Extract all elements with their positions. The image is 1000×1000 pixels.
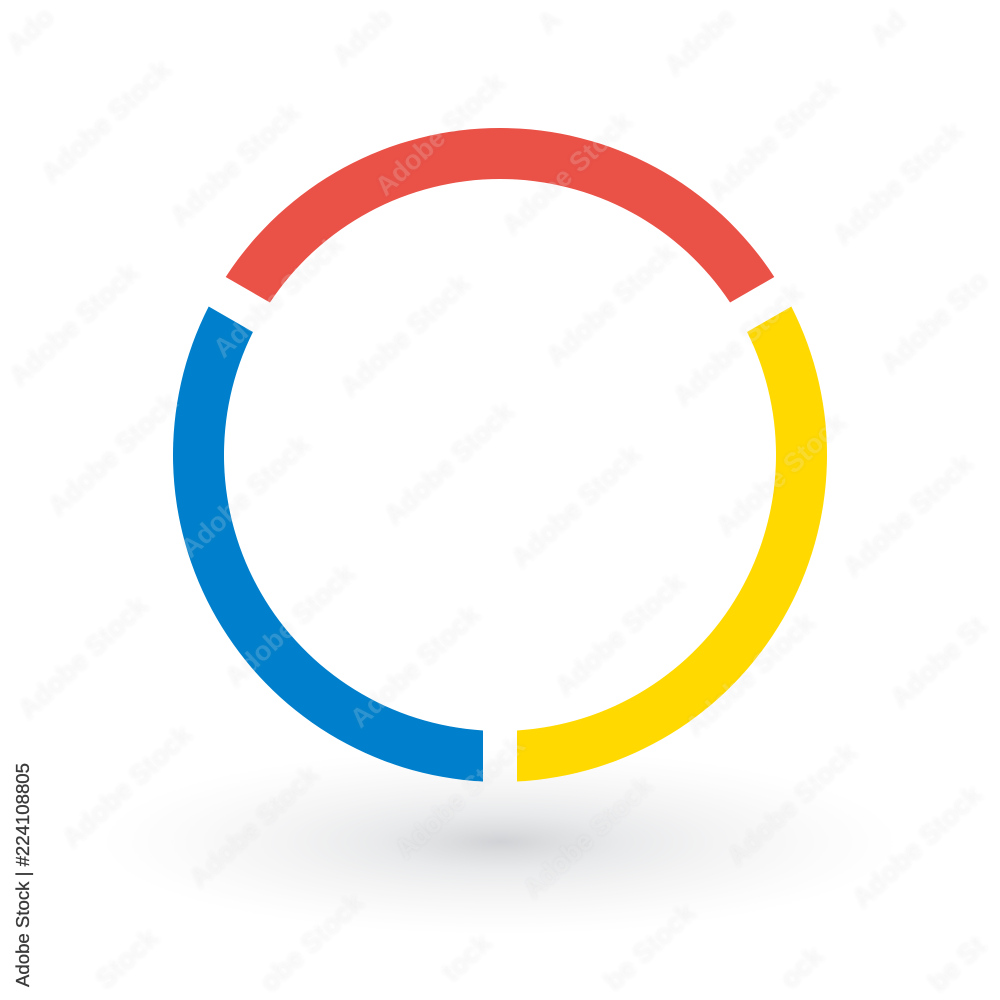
stock watermark pattern: Ado bbox=[1, 2, 59, 59]
stock watermark pattern: Adobe Stock bbox=[827, 116, 969, 251]
stock watermark pattern: Stock bbox=[90, 922, 165, 995]
stock watermark pattern: Adobe Stock bbox=[496, 106, 638, 241]
stock watermark pattern: be St bbox=[923, 930, 991, 997]
stock watermark pattern: Adobe Stock bbox=[174, 429, 316, 564]
stock watermark pattern: A bbox=[532, 4, 566, 39]
stock watermark pattern: Adobe Stock bbox=[12, 590, 154, 725]
stock watermark pattern: Adobe Stock bbox=[219, 558, 361, 693]
vertical stock image id text: Adobe Stock | #224108805 bbox=[12, 763, 33, 987]
stock watermark pattern: Adobe Stock bbox=[378, 396, 520, 531]
segment: red top arc bbox=[226, 128, 774, 303]
stock watermark pattern: Adobe Stock bbox=[710, 407, 852, 542]
stock watermark pattern: Adobe Stock bbox=[183, 759, 325, 894]
stock watermark pattern: Adobe Stock bbox=[334, 268, 476, 403]
stock watermark pattern: Adobe Stock bbox=[344, 599, 486, 734]
stock watermark pattern: Adobe bbox=[659, 2, 741, 81]
stock watermark pattern: Adobe Stock bbox=[3, 257, 145, 392]
stock watermark pattern: Adobe Stock bbox=[549, 567, 691, 702]
stock watermark pattern: Ad bbox=[865, 5, 911, 51]
stock watermark pattern: obe Stock bbox=[254, 887, 370, 997]
stock watermark pattern: ock bbox=[775, 940, 830, 994]
segment: blue left arc bbox=[173, 306, 483, 782]
stock watermark pattern: Adobe Stock bbox=[837, 448, 979, 583]
stock watermark pattern: Adobe Stock bbox=[389, 730, 531, 865]
stock watermark pattern: Adobe Stock bbox=[42, 387, 184, 522]
stock watermark pattern: Adobe St bbox=[885, 611, 992, 713]
stock watermark pattern: be Stock bbox=[598, 897, 702, 996]
stock watermark pattern: Adobe Stock bbox=[56, 719, 198, 854]
stock watermark pattern: Adobe Stock bbox=[35, 54, 177, 189]
stock watermark pattern: Adobe Stock bbox=[679, 607, 821, 742]
stock watermark pattern: Adobe Stock bbox=[369, 67, 511, 202]
stock watermark pattern: Adobe Stock bbox=[505, 439, 647, 574]
stock watermark pattern: Adob bbox=[327, 2, 398, 71]
stock watermark pattern: Adobe Stock bbox=[164, 97, 306, 232]
stock watermark pattern: Adobe Stock bbox=[540, 237, 682, 372]
stock watermark pattern: Adobe Stock bbox=[846, 779, 988, 914]
stock watermark pattern: Adobe Stock bbox=[667, 277, 809, 412]
stock watermark pattern: Adobe Stock bbox=[517, 770, 659, 905]
drop shadow below the ring bbox=[100, 749, 900, 935]
stock watermark pattern: tock bbox=[436, 927, 498, 987]
stock watermark pattern: Adobe Stock bbox=[721, 737, 863, 872]
stock watermark pattern: Adobe Sto bbox=[875, 265, 994, 379]
ring diagram bbox=[173, 128, 827, 782]
segment: yellow right arc bbox=[517, 306, 827, 782]
stock watermark pattern: Adobe Stock bbox=[702, 72, 844, 207]
stock watermark pattern: Adobe Stock bbox=[207, 229, 349, 364]
